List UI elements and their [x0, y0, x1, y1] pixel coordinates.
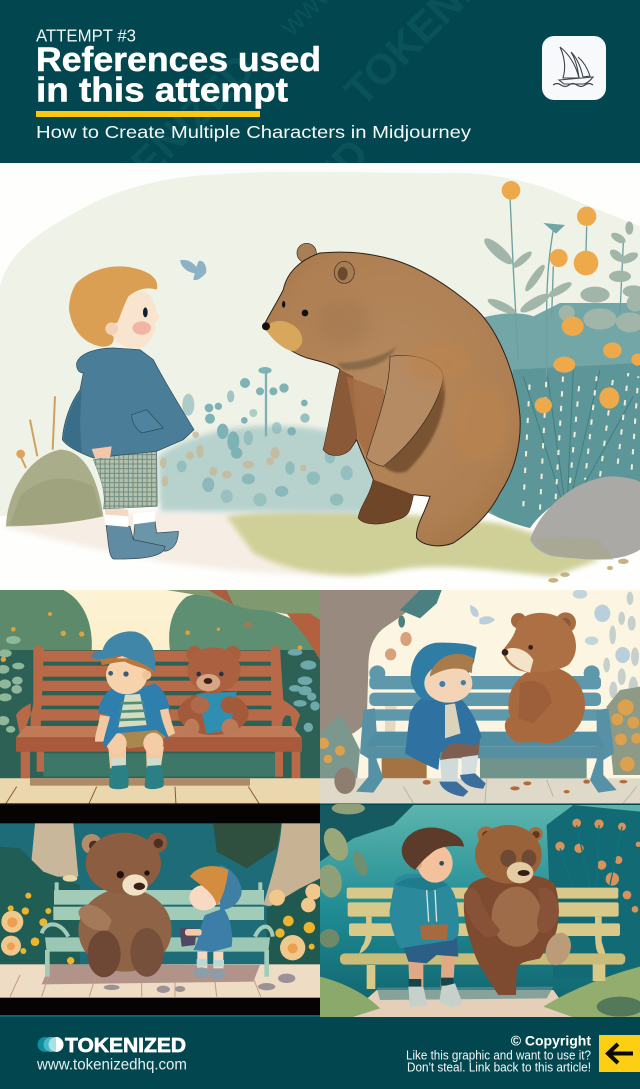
- website URL: www.tokenizedhq.com: [36, 1056, 187, 1074]
- boy: [62, 266, 194, 559]
- watermark: TOKENIZED: [173, 130, 377, 334]
- pavement: [320, 767, 640, 805]
- foliage and flowers: [316, 802, 640, 978]
- boy in hood: [405, 643, 486, 797]
- subtitle: How to Create Multiple Characters in Midjourney: [36, 122, 471, 142]
- leaves: [481, 221, 640, 332]
- ground and grass: [320, 967, 640, 1018]
- bear shading: [323, 370, 357, 455]
- image 3: giant bear and small boy on green bench: [0, 805, 321, 1020]
- butterfly: [180, 260, 206, 280]
- yellow bench: [340, 888, 625, 989]
- hero illustration: boy meets bear: [0, 163, 640, 590]
- stems and light dashes: [523, 370, 634, 498]
- brown bear: [464, 825, 575, 995]
- ground: [0, 511, 600, 576]
- brown bear: [502, 612, 585, 743]
- title: in this attempt: [36, 72, 288, 110]
- blue bench: [356, 665, 617, 793]
- middle foliage: [158, 367, 377, 513]
- red bench: [16, 646, 302, 788]
- header panel: [0, 0, 640, 348]
- bear face: [265, 321, 302, 351]
- pavement: [0, 964, 320, 998]
- orange flowers: [502, 181, 640, 413]
- copyright note: [406, 1032, 591, 1074]
- boy in teal hoodie: [390, 827, 464, 1008]
- right-hand plants: [481, 181, 640, 528]
- tree and foliage: [318, 589, 640, 783]
- watermark: [60, 0, 608, 348]
- image 1: boy and teddy bear on red bench: [0, 590, 320, 805]
- logo: Tokenized: TOKENIZED: [65, 1034, 186, 1057]
- bushes: [0, 590, 320, 778]
- footer panel: [0, 1017, 640, 1089]
- stems: [510, 196, 623, 376]
- kicker: attempt number: ATTEMPT #3: [36, 26, 136, 46]
- copyright note: Like this graphic and want to use it?: [406, 1048, 591, 1062]
- small boy: [179, 865, 242, 980]
- orange sprigs: [21, 396, 55, 468]
- title: References used: [36, 41, 321, 79]
- bear: [262, 243, 520, 546]
- rock right: [530, 476, 640, 560]
- title underline: [36, 111, 260, 117]
- icon: Midjourney boat logo: [542, 36, 606, 100]
- jacket: [62, 348, 194, 458]
- trees and flowers: [0, 823, 321, 968]
- big teddy bear: [78, 833, 172, 977]
- toy bear: [178, 646, 249, 737]
- image 4: boy in hoodie and brown bear on yellow bench: [316, 802, 640, 1018]
- boy in blue cap: [91, 631, 175, 789]
- checked shorts: [93, 448, 157, 509]
- boots: [133, 521, 178, 551]
- image 2: boy in blue hood and bear on blue bench: [318, 589, 640, 805]
- copyright note: © Copyright: [511, 1032, 591, 1048]
- head: [112, 291, 159, 348]
- icon: yellow back arrow: [599, 1035, 640, 1072]
- rock left: [6, 450, 103, 526]
- watercolor wash: [0, 172, 640, 516]
- pavement: [0, 778, 320, 805]
- green bench: [42, 882, 273, 977]
- title: [36, 41, 321, 110]
- copyright note: Don't steal. Link back to this article!: [407, 1060, 591, 1074]
- ground specks: [548, 559, 629, 583]
- watermark: TOKENIZED: [60, 45, 264, 249]
